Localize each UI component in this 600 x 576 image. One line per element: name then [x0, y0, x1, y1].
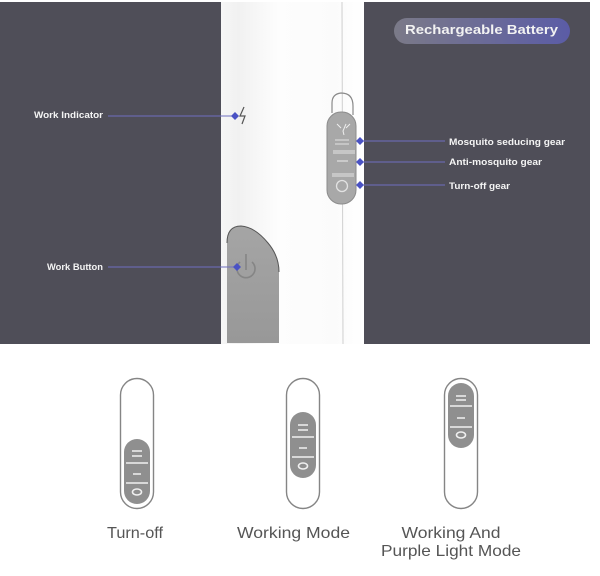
- work button: [227, 226, 279, 343]
- device body: [221, 2, 364, 344]
- switch diagram: turn-off: [120, 378, 154, 508]
- callout: work button: [47, 262, 241, 273]
- badge: rechargeable battery: Rechargeable Battery: [405, 22, 559, 37]
- callout: work button: Work Button: [47, 262, 103, 273]
- callout: turn-off gear: [356, 181, 510, 192]
- callout: work indicator: [34, 110, 239, 121]
- callout: anti-mosquito gear: Anti-mosquito gear: [449, 157, 542, 168]
- label: working and purple light mode: Purple Light Mode: [381, 543, 521, 560]
- panel: dark product background: [0, 2, 590, 344]
- switch diagram: working and purple light mode: [444, 378, 478, 508]
- callout: mosquito seducing gear: [356, 137, 565, 148]
- label: working mode: Working Mode: [237, 525, 350, 542]
- switch diagram: working mode: [286, 378, 320, 508]
- callout: mosquito seducing gear: Mosquito seducing gear: [449, 137, 565, 148]
- label: working and purple light mode: Working And: [402, 525, 500, 542]
- icon: work indicator bolt: [240, 107, 245, 124]
- badge: rechargeable battery: [394, 18, 570, 44]
- callout: anti-mosquito gear: [356, 157, 542, 168]
- label: working and purple light mode: [381, 525, 521, 560]
- mode switch on device: [327, 93, 356, 204]
- label: turn-off: Turn-off: [107, 525, 164, 542]
- callout: work indicator: Work Indicator: [34, 110, 103, 121]
- callout: turn-off gear: Turn-off gear: [449, 181, 510, 192]
